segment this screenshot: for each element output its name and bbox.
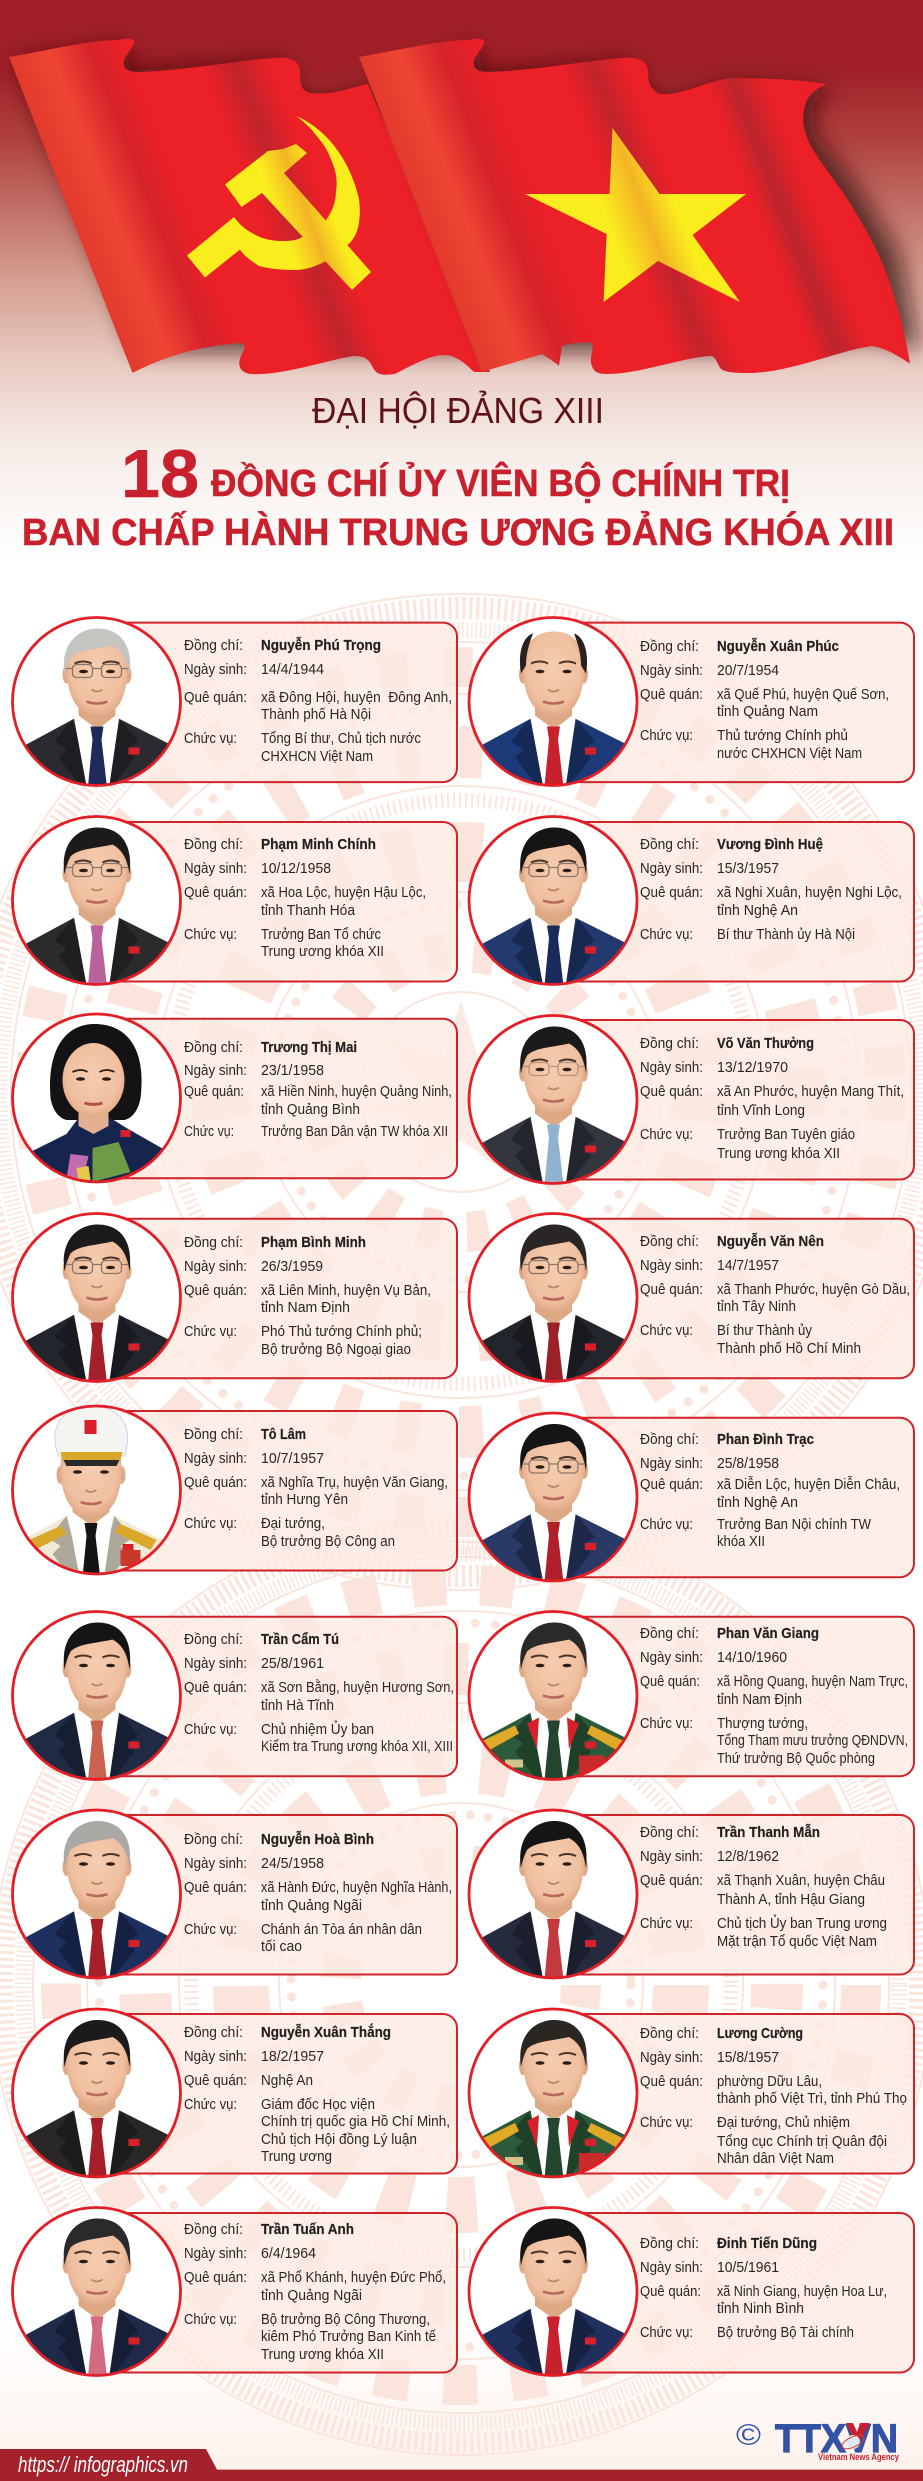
details: tỉnh Nghệ An [717, 902, 798, 919]
details: Kiểm tra Trung ương khóa XII, XIII [261, 1738, 453, 1755]
details: tỉnh Nam Định [717, 1691, 802, 1708]
details: Đồng chí: [640, 1035, 699, 1052]
details: Đồng chí: [184, 2221, 243, 2238]
details [184, 2023, 450, 2165]
portrait [465, 816, 641, 990]
card: Tô Lâm [2, 1406, 457, 1588]
portrait [8, 2009, 184, 2183]
portrait [8, 618, 184, 792]
details: 15/3/1957 [717, 860, 779, 877]
details: CHXHCN Việt Nam [261, 748, 373, 765]
title: BAN CHẤP HÀNH TRUNG ƯƠNG ĐẢNG KHÓA XIII [22, 510, 894, 554]
details: Chức vụ: [184, 1123, 234, 1140]
panel [100, 1617, 457, 1776]
card: Vương Đình Huệ [465, 816, 914, 990]
panel [556, 1020, 914, 1180]
details: Quê quán: [640, 1281, 703, 1298]
details: Đồng chí: [640, 638, 699, 655]
panel [556, 1418, 914, 1577]
card: Trần Tuấn Anh [8, 2208, 457, 2382]
details: Chức vụ: [640, 2324, 693, 2341]
details: Tô Lâm [261, 1426, 306, 1443]
details [184, 1631, 454, 1755]
details: Giám đốc Học viện [261, 2096, 375, 2113]
details [184, 2221, 446, 2363]
icon: hammer and sickle [187, 116, 371, 290]
details [640, 1233, 910, 1357]
details: Phan Đình Trạc [717, 1431, 814, 1448]
details: 26/3/1959 [261, 1258, 323, 1275]
details: Ngày sinh: [640, 2259, 703, 2276]
details: 15/8/1957 [717, 2049, 779, 2066]
details: Ngày sinh: [184, 2048, 247, 2065]
panel [556, 822, 914, 982]
details: Ngày sinh: [640, 1848, 703, 1865]
details: Ngày sinh: [640, 860, 703, 877]
details: Chức vụ: [640, 1322, 693, 1339]
details: Chủ tịch Ủy ban Trung ương [717, 1914, 887, 1932]
details: 25/8/1961 [261, 1655, 324, 1672]
details: Đồng chí: [640, 836, 699, 853]
details: Quê quán: [184, 2269, 247, 2286]
details: Chức vụ: [640, 1715, 693, 1732]
portrait [8, 1810, 184, 1984]
details: Trưởng Ban Nội chính TW [717, 1516, 872, 1533]
details: Chức vụ: [184, 730, 237, 747]
details: Lương Cường [717, 2025, 803, 2042]
card: Nguyễn Phú Trọng [8, 618, 457, 792]
details: 14/10/1960 [717, 1649, 787, 1666]
vietnam national flag [359, 39, 910, 374]
details: Đại tướng, [261, 1515, 325, 1532]
copyright and agency logo: Vietnam News Agency [818, 2452, 899, 2462]
card: Nguyễn Hoà Bình [8, 1810, 457, 1984]
details: Chức vụ: [184, 2096, 237, 2113]
details: Bộ trưởng Bộ Tài chính [717, 2324, 854, 2341]
details: 24/5/1958 [261, 1855, 324, 1872]
details: Tổng Bí thư, Chủ tịch nước [261, 730, 421, 747]
details: Trung ương [261, 2148, 332, 2165]
details: Ngày sinh: [640, 662, 703, 679]
details: Bộ trưởng Bộ Công Thương, [261, 2311, 430, 2328]
panel [100, 1019, 457, 1178]
details: Trưởng Ban Dân vận TW khóa XII [261, 1123, 448, 1140]
details: phường Dữu Lâu, [717, 2073, 822, 2090]
details: Chức vụ: [184, 926, 237, 943]
details [184, 1426, 448, 1550]
details: xã Thạnh Xuân, huyện Châu [717, 1872, 885, 1889]
card: Lương Cường [465, 2009, 914, 2183]
panel [100, 1219, 457, 1378]
details [184, 1234, 431, 1358]
details: Bộ trưởng Bộ Ngoại giao [261, 1341, 411, 1358]
background top gradient [0, 0, 923, 560]
details: Nguyễn Xuân Phúc [717, 638, 839, 655]
details: 18/2/1957 [261, 2048, 324, 2065]
details: Quê quán: [640, 1083, 703, 1100]
card: Trần Thanh Mẫn [465, 1810, 914, 1984]
details: Đồng chí: [184, 1831, 243, 1848]
portrait [465, 1413, 641, 1587]
details: Ngày sinh: [640, 1455, 703, 1472]
details: xã Hoa Lộc, huyện Hậu Lộc, [261, 884, 426, 901]
details: Đồng chí: [184, 637, 243, 654]
details: Chức vụ: [640, 1516, 693, 1533]
details: Ngày sinh: [184, 860, 247, 877]
details: xã Quế Phú, huyện Quế Sơn, [717, 686, 889, 703]
details: Ngày sinh: [184, 1450, 247, 1467]
details: Chức vụ: [640, 727, 693, 744]
portrait [8, 1214, 184, 1388]
details: 10/12/1958 [261, 860, 331, 877]
details [640, 2025, 907, 2167]
details: xã Hiền Ninh, huyện Quảng Ninh, [261, 1083, 452, 1100]
details: tỉnh Nghệ An [717, 1494, 798, 1511]
details: Bộ trưởng Bộ Công an [261, 1533, 395, 1550]
details: 23/1/1958 [261, 1062, 324, 1079]
icon: yellow star [525, 128, 746, 302]
details: Ngày sinh: [640, 1257, 703, 1274]
details: Thứ trưởng Bộ Quốc phòng [717, 1750, 875, 1767]
portrait [8, 2208, 184, 2382]
background bottom tint [0, 2260, 923, 2481]
details: Mặt trận Tổ quốc Việt Nam [717, 1933, 877, 1950]
card: Phan Văn Giang [465, 1612, 914, 1786]
details: Chức vụ: [184, 1515, 237, 1532]
details: xã Phổ Khánh, huyện Đức Phổ, [261, 2269, 446, 2286]
details: tỉnh Thanh Hóa [261, 902, 356, 919]
panel [556, 623, 914, 782]
card: Nguyễn Xuân Thắng [8, 2009, 457, 2183]
details: Chức vụ: [640, 2114, 693, 2131]
details [640, 638, 889, 762]
details: Chủ tịch Hội đồng Lý luận [261, 2131, 417, 2148]
details: Ngày sinh: [184, 1855, 247, 1872]
portrait [465, 1810, 641, 1984]
details: Đồng chí: [640, 1431, 699, 1448]
portrait [465, 2009, 641, 2183]
subtitle: ĐẠI HỘI ĐẢNG XIII [312, 390, 604, 431]
panel [100, 1411, 457, 1570]
details: kiêm Phó Trưởng Ban Kinh tế [261, 2328, 437, 2345]
details: Chức vụ: [640, 926, 693, 943]
title: 18 [121, 436, 199, 512]
details: tỉnh Ninh Bình [717, 2300, 804, 2317]
details: Thành phố Hà Nội [261, 706, 371, 723]
details: Chủ nhiệm Ủy ban [261, 1720, 374, 1738]
details: Đồng chí: [640, 1233, 699, 1250]
details: xã Nghĩa Trụ, huyện Văn Giang, [261, 1474, 448, 1491]
details [184, 1039, 452, 1140]
details: 13/12/1970 [717, 1059, 788, 1076]
card: Đinh Tiến Dũng [465, 2208, 914, 2382]
panel [100, 1815, 457, 1974]
panel [556, 1617, 914, 1776]
card: Trần Cẩm Tú [8, 1612, 457, 1786]
details: Quê quán: [640, 884, 703, 901]
details: Nghệ An [261, 2072, 313, 2089]
portrait [8, 816, 184, 990]
details: tỉnh Quảng Bình [261, 1101, 360, 1118]
card: Nguyễn Xuân Phúc [465, 618, 914, 792]
details: Chức vụ: [184, 1921, 237, 1938]
details: Trần Thanh Mẫn [717, 1824, 820, 1841]
portrait [465, 1612, 641, 1786]
details: Đồng chí: [184, 1426, 243, 1443]
title [22, 436, 894, 554]
details: Ngày sinh: [640, 2049, 703, 2066]
details: Quê quán: [184, 1282, 247, 1299]
panel [556, 2213, 914, 2372]
details: Phạm Bình Minh [261, 1234, 366, 1251]
details: Đồng chí: [184, 1234, 243, 1251]
details [184, 1831, 452, 1955]
portrait [465, 2208, 641, 2382]
details: Quê quán: [640, 686, 703, 703]
details: 6/4/1964 [261, 2245, 316, 2262]
details: Ngày sinh: [184, 1655, 247, 1672]
card: Trương Thị Mai [10, 1014, 457, 1188]
details: 10/7/1957 [261, 1450, 324, 1467]
details [640, 2235, 887, 2341]
card: Võ Văn Thưởng [465, 1016, 914, 1190]
details: xã Hành Đức, huyện Nghĩa Hành, [261, 1879, 452, 1896]
details: Bí thư Thành ủy [717, 1322, 812, 1339]
details: Đồng chí: [184, 2024, 243, 2041]
details: Quê quán: [184, 884, 247, 901]
details: xã Nghi Xuân, huyện Nghi Lộc, [717, 884, 902, 901]
details: Trưởng Ban Tổ chức [261, 926, 381, 943]
details: tỉnh Quảng Ngãi [261, 2287, 362, 2304]
details: Vương Đình Huệ [717, 836, 823, 853]
details: Đồng chí: [640, 2235, 699, 2252]
details: tỉnh Hưng Yên [261, 1491, 348, 1508]
website url: https:// infographics.vn [18, 2452, 188, 2477]
details: tỉnh Vĩnh Long [717, 1102, 805, 1119]
details: Quê quán: [184, 2072, 247, 2089]
portrait [465, 1214, 641, 1388]
details: nước CHXHCN Việt Nam [717, 745, 862, 762]
details: Ngày sinh: [184, 661, 247, 678]
details: Đồng chí: [184, 1039, 243, 1056]
details: Nhân dân Việt Nam [717, 2150, 834, 2167]
details: Trần Tuấn Anh [261, 2221, 354, 2238]
panel [100, 2213, 457, 2372]
details: Nguyễn Văn Nên [717, 1233, 824, 1250]
details: Bí thư Thành ủy Hà Nội [717, 926, 855, 943]
details: Thượng tướng, [717, 1715, 808, 1732]
card: Phan Đình Trạc [465, 1413, 914, 1587]
details: Quê quán: [640, 2283, 701, 2300]
details: Ngày sinh: [640, 1649, 703, 1666]
details: Đinh Tiến Dũng [717, 2235, 817, 2252]
details: xã An Phước, huyện Mang Thít, [717, 1083, 904, 1100]
details: Quê quán: [184, 1474, 247, 1491]
details: Trung ương khóa XII [261, 943, 384, 960]
footer bar [0, 2449, 923, 2481]
details: 25/8/1958 [717, 1455, 779, 1472]
details: tỉnh Tây Ninh [717, 1298, 796, 1315]
details: Chức vụ: [184, 1323, 237, 1340]
panel [556, 1219, 914, 1378]
details: Đồng chí: [640, 1824, 699, 1841]
details: tối cao [261, 1938, 302, 1955]
details: Chức vụ: [184, 2311, 237, 2328]
details [184, 836, 426, 960]
details: Quê quán: [184, 1879, 247, 1896]
details: Phó Thủ tướng Chính phủ; [261, 1323, 422, 1340]
details: Quê quán: [640, 2073, 703, 2090]
details: tỉnh Hà Tĩnh [261, 1697, 334, 1714]
details: Đồng chí: [184, 1631, 243, 1648]
copyright and agency logo: © [736, 2419, 761, 2452]
details: Nguyễn Xuân Thắng [261, 2023, 391, 2041]
details: Trung ương khóa XII [717, 1145, 840, 1162]
details: Trương Thị Mai [261, 1039, 357, 1056]
details: thành phố Việt Trì, tỉnh Phú Thọ [717, 2090, 907, 2107]
details: Nguyễn Hoà Bình [261, 1831, 374, 1848]
panel [100, 822, 457, 982]
details: Ngày sinh: [184, 2245, 247, 2262]
details: Quê quán: [184, 689, 247, 706]
card: Nguyễn Văn Nên [465, 1214, 914, 1388]
details: 14/7/1957 [717, 1257, 779, 1274]
details: 20/7/1954 [717, 662, 779, 679]
card: Phạm Minh Chính [8, 816, 457, 990]
details: Nguyễn Phú Trọng [261, 637, 381, 654]
details: xã Diễn Lộc, huyện Diễn Châu, [717, 1476, 900, 1493]
details: tỉnh Quảng Nam [717, 703, 818, 720]
details: Ngày sinh: [640, 1059, 703, 1076]
details: Phạm Minh Chính [261, 836, 376, 853]
details: xã Đông Hội, huyện Đông Anh, [261, 689, 452, 706]
card: Phạm Bình Minh [8, 1214, 457, 1388]
details: Trung ương khóa XII [261, 2346, 384, 2363]
details: xã Ninh Giang, huyện Hoa Lư, [717, 2283, 887, 2300]
details [184, 637, 452, 765]
panel [100, 623, 457, 782]
details: Ngày sinh: [184, 1258, 247, 1275]
details: Phan Văn Giang [717, 1625, 819, 1642]
details: Chức vụ: [184, 1721, 237, 1738]
panel [556, 2014, 914, 2174]
details: Chức vụ: [640, 1126, 693, 1143]
details: Thành phố Hồ Chí Minh [717, 1340, 861, 1357]
details: Quê quán: [184, 1083, 244, 1100]
details: Tổng cục Chính trị Quân đội [717, 2133, 887, 2150]
details: Quê quán: [640, 1872, 703, 1889]
copyright and agency logo: TTXVN [775, 2417, 898, 2461]
details [640, 1431, 900, 1550]
details: xã Liên Minh, huyện Vụ Bản, [261, 1282, 431, 1299]
details: Quê quán: [184, 1679, 247, 1696]
details: Ngày sinh: [184, 1062, 247, 1079]
details: Chánh án Tòa án nhân dân [261, 1921, 422, 1938]
flag shadow [14, 44, 920, 352]
portrait [465, 1016, 641, 1190]
details: tỉnh Nam Định [261, 1299, 350, 1316]
details: 12/8/1962 [717, 1848, 779, 1865]
details: Võ Văn Thưởng [717, 1035, 814, 1052]
details: Đồng chí: [640, 1625, 699, 1642]
portrait [2, 1406, 180, 1588]
panel [556, 1815, 914, 1974]
details: Thành A, tỉnh Hậu Giang [717, 1891, 865, 1908]
details: Quê quán: [640, 1673, 700, 1690]
details: 14/4/1944 [261, 661, 324, 678]
details: Đồng chí: [184, 836, 243, 853]
background drum pattern: lower [0, 1515, 923, 2455]
details: Đồng chí: [640, 2025, 699, 2042]
details: Quê quán: [640, 1476, 703, 1493]
details: Trưởng Ban Tuyên giáo [717, 1126, 855, 1143]
details: 10/5/1961 [717, 2259, 779, 2276]
details: Chức vụ: [640, 1915, 693, 1932]
portrait [10, 1014, 182, 1188]
details [640, 1035, 904, 1162]
details: xã Sơn Bằng, huyện Hương Sơn, [261, 1679, 454, 1696]
details: Trần Cẩm Tú [261, 1631, 339, 1648]
details: khóa XII [717, 1533, 765, 1550]
details: Đại tướng, Chủ nhiệm [717, 2114, 850, 2131]
portrait [8, 1612, 184, 1786]
details: tỉnh Quảng Ngãi [261, 1897, 362, 1914]
details: Thủ tướng Chính phủ [717, 727, 848, 744]
details [640, 836, 902, 943]
details: Chính trị quốc gia Hồ Chí Minh, [261, 2113, 450, 2130]
panel [100, 2014, 457, 2174]
communist party flag [9, 39, 490, 375]
background drum pattern: upper [0, 594, 923, 1590]
details [640, 1824, 887, 1950]
title: ĐỒNG CHÍ ỦY VIÊN BỘ CHÍNH TRỊ [211, 460, 790, 505]
details [640, 1625, 908, 1767]
portrait [465, 618, 641, 792]
